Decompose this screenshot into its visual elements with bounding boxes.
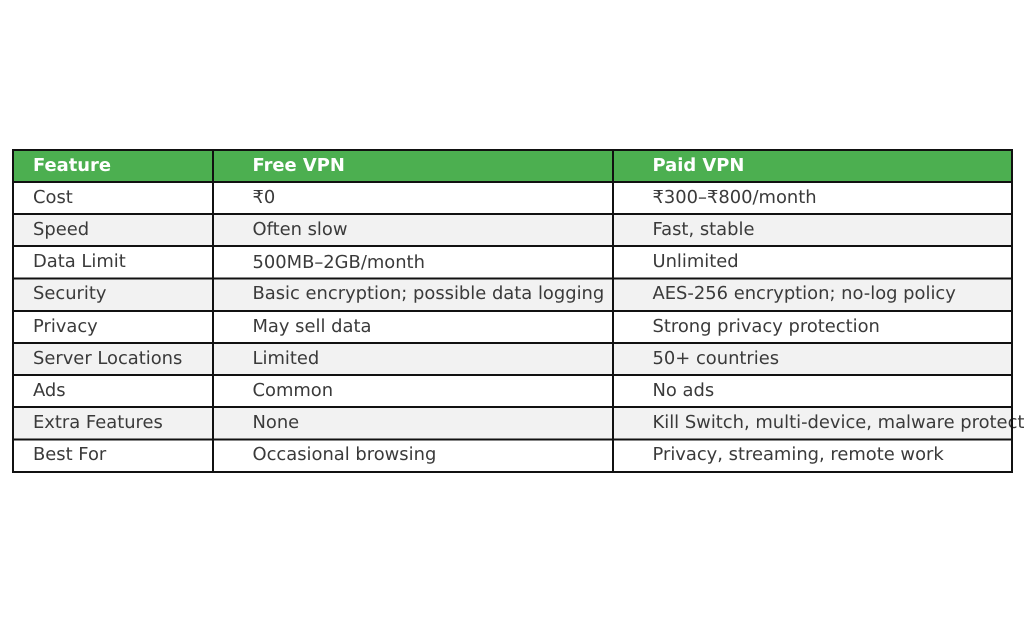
row: Extra Features [13, 407, 1024, 439]
row: Cost: Cost [33, 187, 73, 208]
row: Best For [13, 439, 1012, 472]
row: Privacy: Strong privacy protection [652, 316, 880, 337]
row: Ads: Common [252, 380, 333, 401]
table header row [13, 150, 1012, 182]
row: Speed: Often slow [252, 219, 347, 240]
row: Speed: Speed [33, 219, 89, 240]
row: Privacy: Privacy [33, 316, 98, 337]
row: Privacy [13, 311, 1012, 343]
row: Cost: ₹0 [252, 187, 275, 208]
row: Security: Basic encryption; possible data logging [252, 283, 604, 304]
row: Security: AES-256 encryption; no-log policy [652, 283, 956, 304]
row: Best For: Occasional browsing [252, 444, 436, 465]
row: Ads: No ads [652, 380, 714, 401]
row: Ads: Ads [33, 380, 66, 401]
row: Privacy: May sell data [252, 316, 371, 337]
row: Server Locations: Limited [252, 348, 319, 369]
row: Server Locations [13, 343, 1012, 375]
row: Data Limit: Unlimited [652, 251, 739, 272]
row: Data Limit [13, 246, 1012, 278]
row: Security: Security [33, 283, 107, 304]
row: Cost [13, 182, 1012, 214]
row: Server Locations: 50+ countries [652, 348, 779, 369]
row: Ads [13, 375, 1012, 407]
row: Server Locations: Server Locations [33, 348, 182, 369]
row: Security [13, 278, 1012, 311]
row: Speed [13, 214, 1012, 246]
row: Best For: Privacy, streaming, remote work [652, 444, 944, 465]
row: Cost: ₹300–₹800/month [652, 187, 817, 208]
table header row: Free VPN [252, 155, 345, 176]
table header row: Feature [33, 155, 111, 176]
row: Extra Features: Extra Features [33, 412, 163, 433]
row: Best For: Best For [33, 444, 107, 465]
row: Extra Features: None [252, 412, 299, 433]
row: Data Limit: Data Limit [33, 251, 126, 272]
table header row: Paid VPN [652, 155, 744, 176]
row: Speed: Fast, stable [652, 219, 754, 240]
row: Data Limit: 500MB–2GB/month [252, 252, 425, 273]
